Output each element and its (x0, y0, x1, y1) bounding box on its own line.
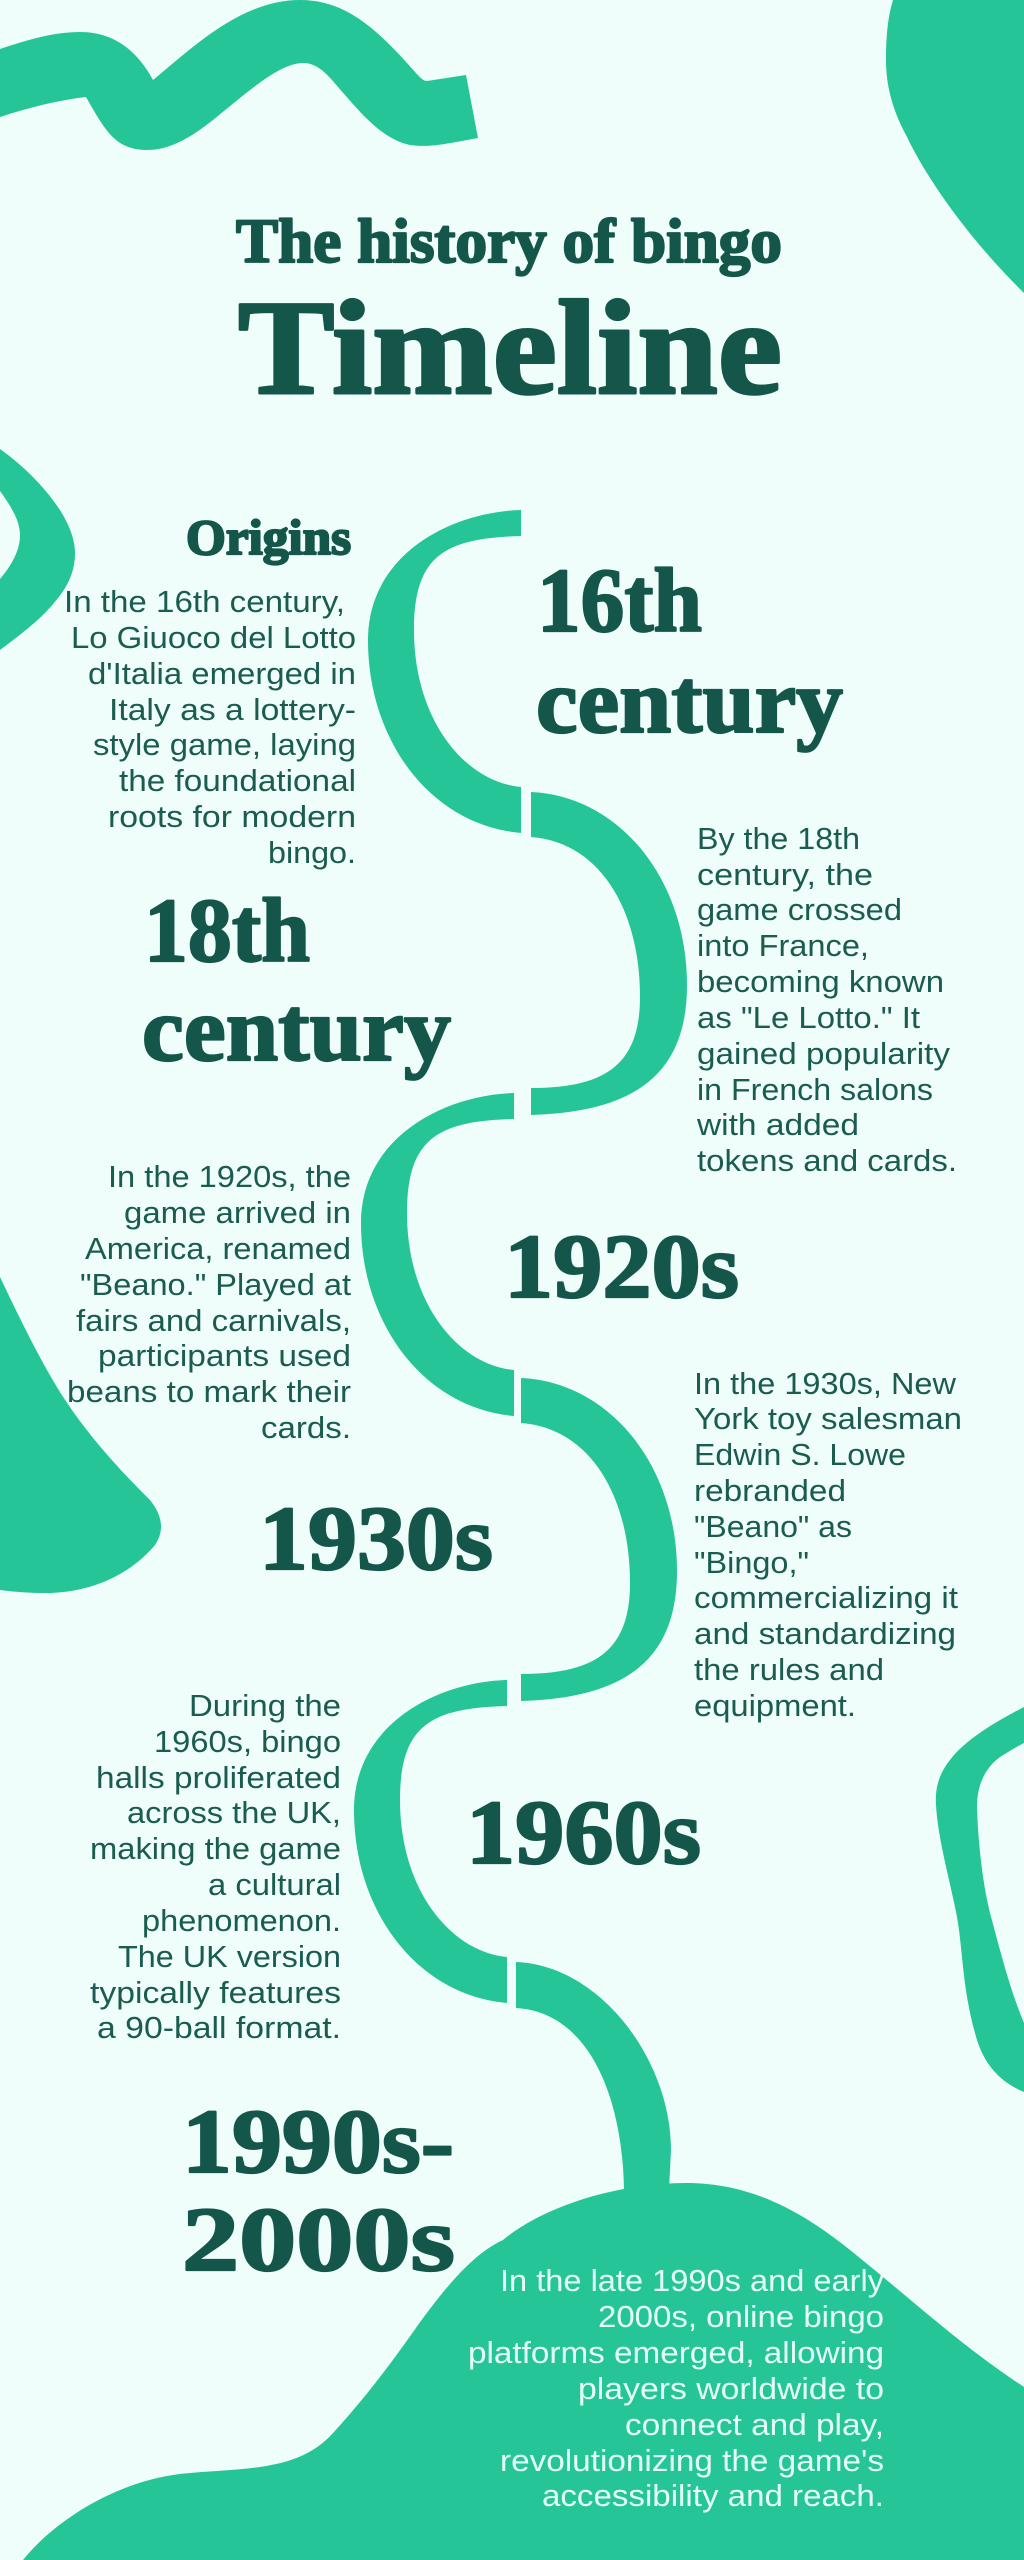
text: 1930s: Edwin S. Lowe (694, 1437, 906, 1472)
decorative hook left (0, 449, 75, 650)
text: 1960s: During the (189, 1688, 341, 1723)
timeline segment 2 (531, 792, 687, 1115)
origins body: Italy as a lottery- (109, 692, 356, 727)
heading: 1930s: 1930s (259, 1488, 493, 1589)
text: 18th century: with added (696, 1107, 859, 1142)
text: 1920s: In the 1920s, the (108, 1159, 351, 1194)
timeline segment 1 (368, 510, 521, 833)
text: 1930s: "Beano" as (694, 1509, 852, 1544)
origins body (64, 584, 356, 870)
text: 1990s-2000s: 2000s, online bingo (598, 2299, 884, 2334)
subtitle: The history of bingo (236, 208, 782, 276)
text: 1960s: The UK version (118, 1939, 341, 1974)
text: 1990s-2000s (468, 2263, 885, 2513)
text: 18th century: in French salons (697, 1072, 933, 1107)
heading: 16th century: 16th (537, 550, 702, 651)
text: 1960s (90, 1688, 341, 2045)
text: 1920s: America, renamed (85, 1231, 351, 1266)
text: 1930s: and standardizing (694, 1616, 956, 1651)
origins body: style game, laying (93, 727, 356, 762)
text: 1930s: rebranded (694, 1473, 846, 1508)
heading: 18th century (142, 880, 451, 1080)
heading: 1990s-2000s: 2000s (182, 2189, 455, 2290)
text: 1930s: "Bingo," (694, 1545, 809, 1580)
text: 1960s: making the game (90, 1831, 341, 1866)
text: 1960s: across the UK, (127, 1795, 341, 1830)
timeline path (354, 510, 687, 2195)
text: 18th century (696, 821, 957, 1178)
text: 1990s-2000s: In the late 1990s and early (500, 2263, 885, 2298)
text: 1960s: typically features (90, 1975, 341, 2010)
main title: Timeline (238, 274, 782, 423)
text: 1920s: fairs and carnivals, (76, 1303, 351, 1338)
text: 18th century: By the 18th (697, 821, 860, 856)
heading: 16th century: century (536, 651, 843, 752)
text: 1990s-2000s: accessibility and reach. (542, 2478, 884, 2513)
origins heading: Origins (186, 509, 351, 565)
text: 1920s: "Beano." Played at (80, 1267, 351, 1302)
origins body: d'Italia emerged in (88, 656, 356, 691)
text: 1920s: cards. (261, 1410, 351, 1445)
text: 1960s: phenomenon. (142, 1903, 341, 1938)
panel: origins text (64, 509, 356, 870)
decorative hook right (936, 1707, 1024, 2092)
text: 18th century: into France, (697, 928, 869, 963)
text: 1930s: York toy salesman (694, 1401, 962, 1436)
origins body: In the 16th century, (64, 584, 345, 619)
text: 1990s-2000s: players worldwide to (578, 2371, 884, 2406)
origins body: Lo Giuoco del Lotto (71, 620, 356, 655)
decorative wave top left (0, 0, 478, 150)
text: 1930s: the rules and (694, 1652, 884, 1687)
timeline segment 6 (516, 1962, 671, 2195)
bottom blob (23, 2183, 1024, 2560)
decorative blob left (0, 1277, 161, 1593)
text: 18th century: gained popularity (697, 1036, 951, 1071)
timeline segment 3 (361, 1093, 514, 1416)
text: 1930s: equipment. (694, 1688, 856, 1723)
text: 1930s (694, 1366, 962, 1723)
text: 1930s: commercializing it (694, 1580, 958, 1615)
decorative blob top right (886, 0, 1024, 293)
text: 1930s: In the 1930s, New (694, 1366, 957, 1401)
text: 1990s-2000s: platforms emerged, allowing (468, 2335, 884, 2370)
text: 1960s: 1960s, bingo (154, 1724, 341, 1759)
heading: 1990s-2000s: 1990s- (182, 2091, 454, 2192)
text: 1960s: a 90-ball format. (97, 2010, 341, 2045)
text: 1920s: participants used (98, 1338, 351, 1373)
heading: 16th century (536, 550, 843, 752)
origins body: bingo. (268, 835, 356, 870)
text: 1920s (67, 1159, 351, 1445)
text: 1990s-2000s: revolutionizing the game's (500, 2443, 884, 2478)
text: 18th century: game crossed (697, 892, 902, 927)
text: 18th century: as "Le Lotto." It (697, 1000, 920, 1035)
heading: 18th century: 18th (144, 880, 310, 981)
title (236, 208, 782, 423)
heading: 18th century: century (142, 979, 451, 1080)
timeline segment 4 (521, 1378, 677, 1701)
origins body: roots for modern (108, 799, 356, 834)
text: 1960s: a cultural (208, 1867, 341, 1902)
heading: 1960s: 1960s (466, 1782, 701, 1883)
text: 1920s: beans to mark their (67, 1374, 351, 1409)
text: 1960s: halls proliferated (96, 1760, 341, 1795)
text: 18th century: becoming known (697, 964, 944, 999)
text: 1990s-2000s: connect and play, (625, 2407, 884, 2442)
text: 18th century: century, the (697, 857, 873, 892)
heading: 1990s-2000s (182, 2091, 455, 2290)
origins body: the foundational (119, 763, 356, 798)
heading: 1920s: 1920s (504, 1216, 739, 1317)
timeline segment 5 (354, 1680, 507, 2003)
text: 1920s: game arrived in (124, 1195, 351, 1230)
text: 18th century: tokens and cards. (697, 1143, 957, 1178)
